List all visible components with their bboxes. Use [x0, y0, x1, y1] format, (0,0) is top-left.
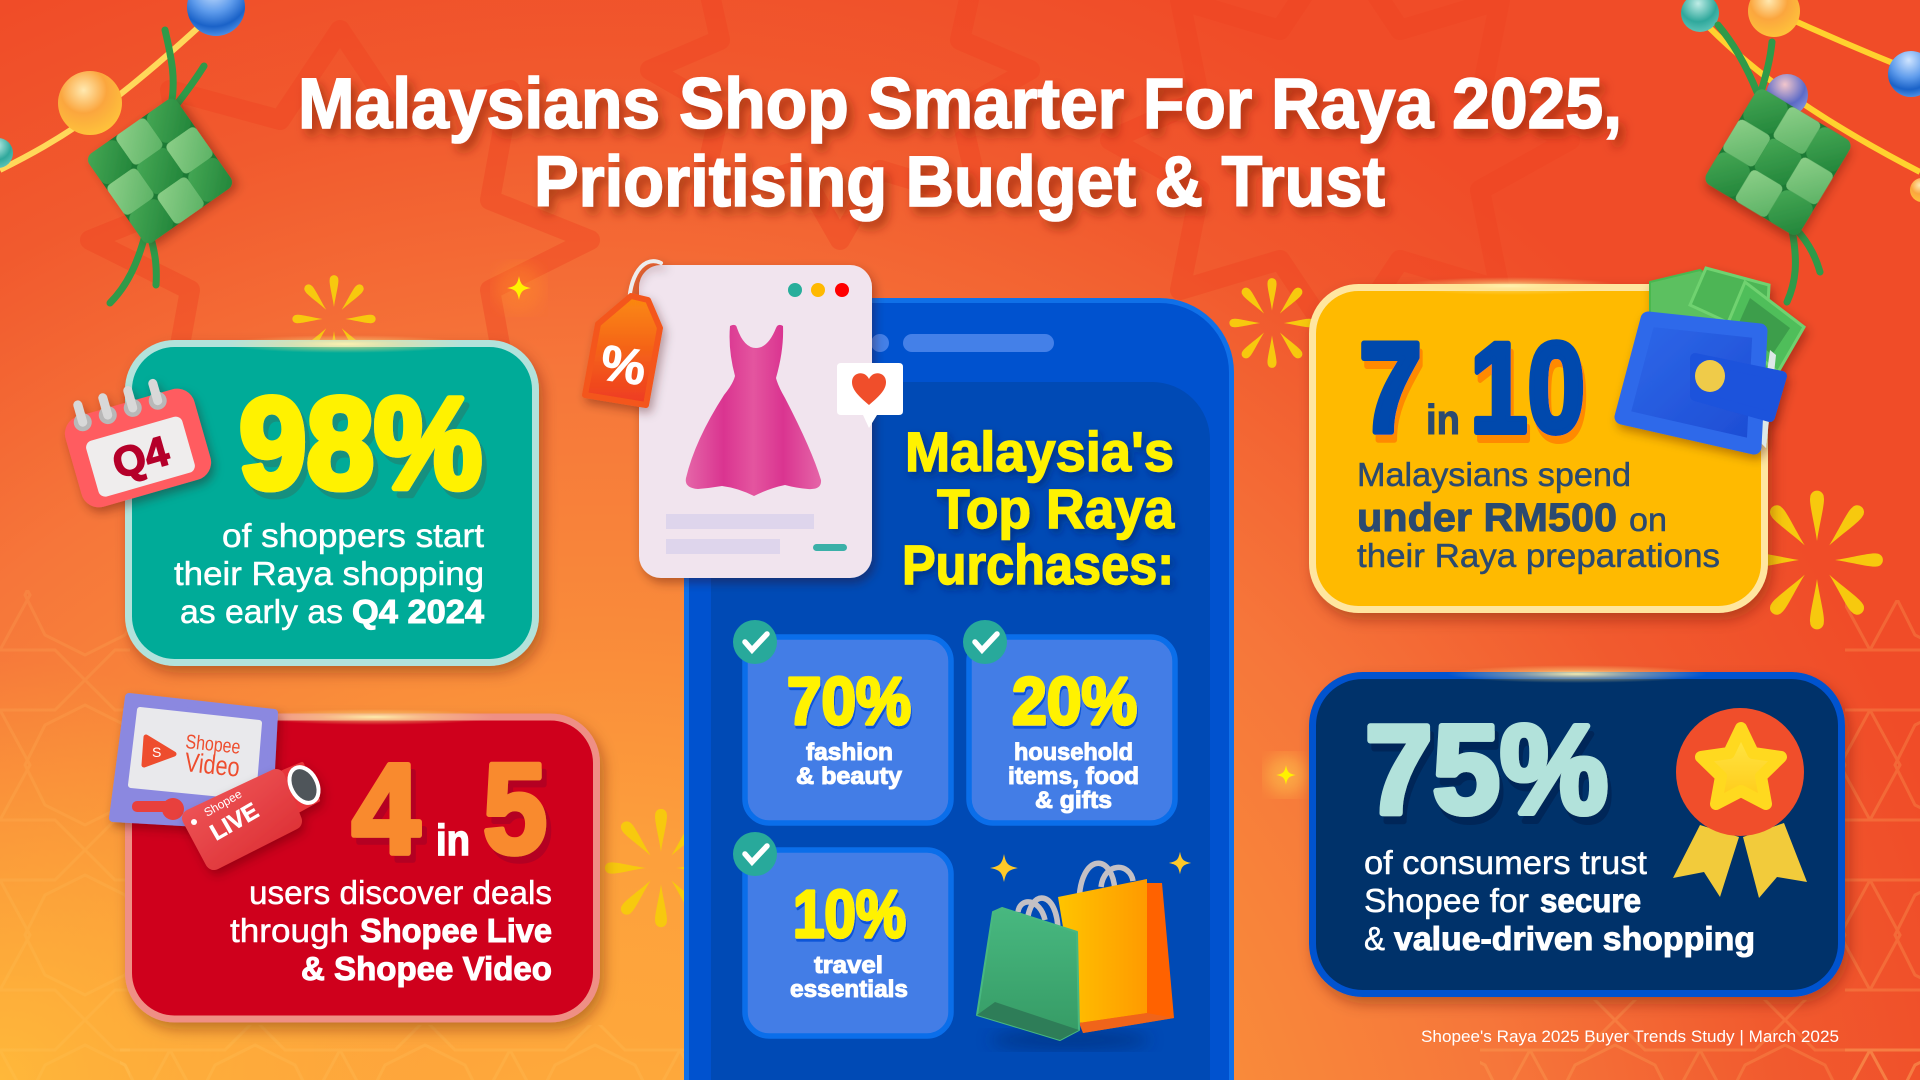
panel: 10% travel essentials: travel	[814, 952, 883, 979]
text: spending description: Malaysians spend	[1357, 456, 1631, 493]
icon: discount tag: %	[597, 334, 649, 396]
text: consumers description: secure	[1540, 882, 1641, 919]
panel: 10% travel essentials: essentials	[790, 976, 908, 1003]
text: consumers description: Shopee for	[1364, 882, 1529, 919]
right garland	[1681, 0, 1920, 202]
stat: 75%: 75%	[1365, 699, 1608, 840]
panel: 10% travel essentials: 10%	[793, 877, 906, 952]
phone inner panel	[711, 382, 1210, 1080]
stat: 7 in 10: in	[1426, 396, 1460, 443]
stat: 4 in 5: in	[436, 816, 470, 865]
text: spending description: under RM500	[1357, 496, 1617, 540]
icon: Q4 calendar	[58, 374, 215, 512]
panel: 20% household items: household	[1014, 739, 1133, 766]
icon: wallet with cash	[1622, 268, 1804, 448]
icon: heart bubble	[837, 363, 903, 428]
icon: Shopee Video screen: S	[152, 744, 161, 760]
text: shoppers description: as early as	[180, 593, 343, 630]
title: Malaysians Shop Smarter For Raya 2025,	[298, 65, 1622, 144]
panel: 7 in 10	[1312, 277, 1764, 610]
panel: 20% household items	[969, 637, 1175, 823]
heading: top purchases	[902, 420, 1175, 596]
heading: top purchases: Top Raya	[937, 477, 1175, 540]
panel: 70% fashion and beauty: & beauty	[796, 763, 903, 790]
icon: Q4 calendar: Q4	[107, 427, 175, 487]
title: Prioritising Budget & Trust	[534, 143, 1385, 222]
panel: 98% shoppers	[128, 335, 536, 662]
text: users description: Shopee Live	[360, 912, 552, 949]
stat: 7 in 10	[1359, 317, 1585, 460]
panel: 70% fashion and beauty	[745, 637, 951, 823]
text: users description: through	[230, 912, 349, 949]
panel: 4 in 5 users	[128, 709, 596, 1019]
left garland	[0, 0, 245, 170]
panel: 70% fashion and beauty: fashion	[806, 739, 893, 766]
title	[298, 65, 1622, 222]
text: shoppers description	[174, 517, 485, 630]
stat: 7 in 10: 7	[1359, 317, 1422, 460]
text: spending description: on	[1629, 501, 1667, 538]
text: users description	[230, 874, 552, 987]
text: spending description: their Raya preparations	[1357, 537, 1720, 574]
icon: Shopee Video screen	[113, 697, 274, 827]
icon: pink dress	[686, 325, 821, 496]
source note: Shopee's Raya 2025 Buyer Trends Study | March 2025	[1421, 1027, 1839, 1046]
icon: left ketupat	[85, 30, 235, 303]
heading: top purchases: Malaysia's	[905, 420, 1174, 483]
text: consumers description: value-driven shopping	[1394, 920, 1755, 957]
icon: Shopee Live camera: LIVE	[206, 797, 263, 845]
stat: 4 in 5: 4	[352, 738, 420, 881]
text: users description: users discover deals	[249, 874, 552, 911]
phone	[686, 300, 1232, 1080]
panel: 20% household items: items, food	[1008, 763, 1139, 790]
decorative fireworks	[292, 264, 1883, 927]
stat: 4 in 5: 5	[483, 738, 547, 881]
text: consumers description	[1364, 844, 1755, 957]
heading: top purchases: Purchases:	[902, 533, 1174, 596]
icon: right ketupat	[1702, 25, 1854, 302]
panel: 70% fashion and beauty: 70%	[787, 664, 911, 739]
text: shoppers description: of shoppers start	[222, 517, 484, 554]
panel: 10% travel essentials	[745, 850, 951, 1036]
icon: medal	[1673, 708, 1807, 898]
panel: 20% household items: 20%	[1012, 664, 1137, 739]
icon: check marks	[733, 620, 1007, 876]
text: shoppers description: their Raya shopping	[174, 555, 484, 592]
stat: 7 in 10: 10	[1470, 317, 1585, 460]
stat: 98%: 98%	[239, 370, 482, 516]
icon: Shopee Video screen: Shopee	[184, 731, 241, 759]
text: spending description	[1357, 456, 1720, 574]
icon: Shopee Video screen: Video	[183, 747, 241, 783]
icon: Shopee Live camera	[191, 762, 324, 861]
text: consumers description: &	[1364, 920, 1385, 957]
icon: discount tag	[585, 261, 661, 405]
stat: 4 in 5	[352, 738, 547, 881]
text: consumers description: of consumers trust	[1364, 844, 1647, 881]
text: users description: & Shopee Video	[301, 950, 552, 987]
text: shoppers description: Q4 2024	[352, 593, 485, 630]
icon: Shopee Live camera: Shopee	[202, 787, 245, 820]
icon: shopping bags	[977, 852, 1191, 1050]
panel: 20% household items: & gifts	[1035, 787, 1112, 814]
panel: product window	[639, 265, 872, 578]
panel: 75% consumers trust	[1312, 665, 1842, 994]
